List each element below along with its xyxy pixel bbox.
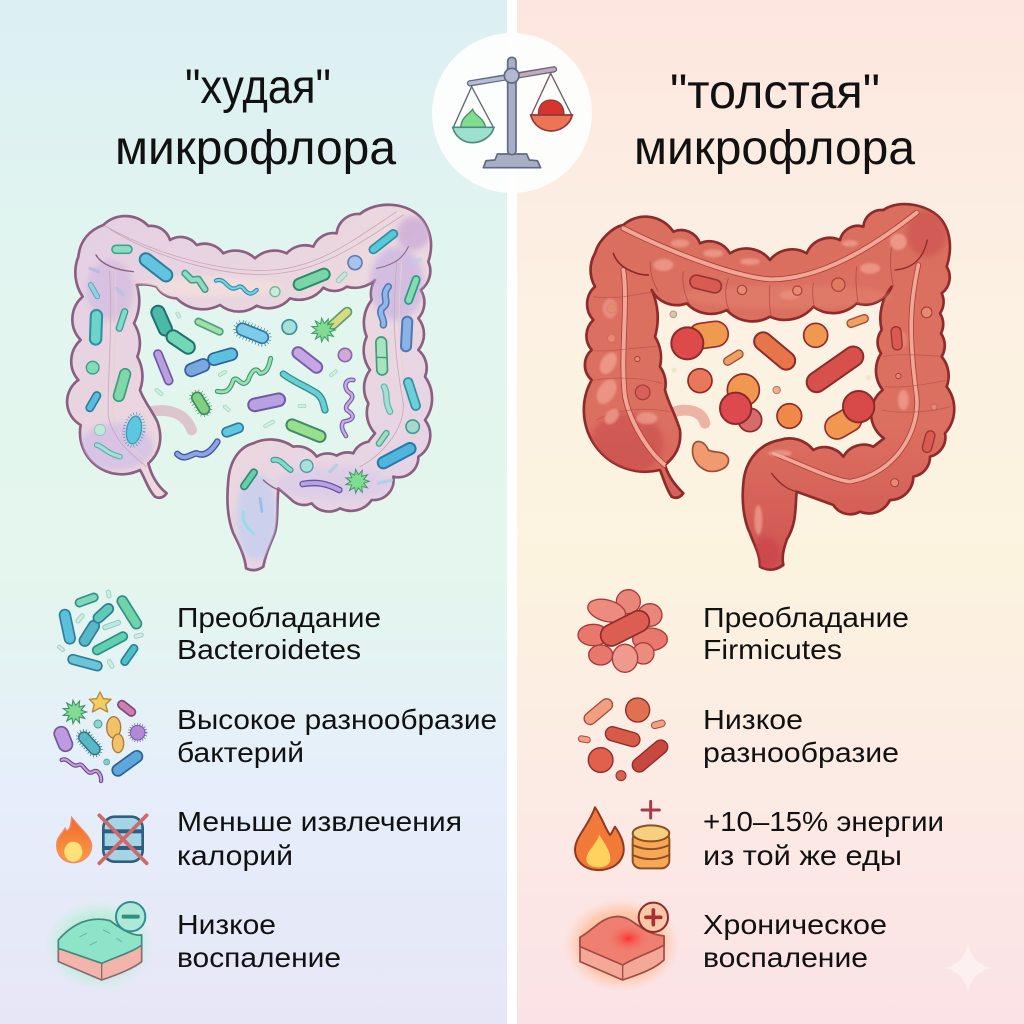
text: fewer calories: Меньше извлечения xyxy=(177,806,462,837)
colon shading and band xyxy=(588,210,950,570)
bacteria inside colon xyxy=(85,228,423,533)
text: low diversity: разнообразие xyxy=(703,737,899,768)
text: low inflammation xyxy=(177,909,341,973)
fold lines xyxy=(613,253,648,275)
icon: Firmicutes cluster xyxy=(578,590,667,672)
text: Bacteroidetes: Преобладание xyxy=(177,602,381,633)
text: low inflammation: воспаление xyxy=(177,942,341,973)
text: Bacteroidetes xyxy=(177,602,381,665)
text: high diversity: бактерий xyxy=(177,737,304,768)
free bacteria xyxy=(670,311,874,471)
appendix xyxy=(675,410,705,423)
panel: thin microflora xyxy=(44,61,497,990)
text: fewer calories: калорий xyxy=(177,840,293,871)
title: thin microflora: микрофлора xyxy=(115,122,396,175)
icon: Bacteroidetes rods xyxy=(57,590,144,672)
icon: low diversity xyxy=(578,696,671,781)
free bacteria between colon loops xyxy=(149,304,353,457)
text: chronic inflammation xyxy=(703,909,887,973)
fold line right xyxy=(895,240,927,270)
title: fat microflora xyxy=(634,66,915,175)
text: chronic inflammation: Хроническое xyxy=(703,909,887,940)
icon: chronic inflammation tissue xyxy=(563,898,680,992)
text: low diversity: Низкое xyxy=(703,704,803,735)
text: chronic inflammation: воспаление xyxy=(703,942,868,973)
panel: fat microflora xyxy=(563,66,954,992)
text: fewer calories xyxy=(177,806,462,871)
text: extra energy: из той же еды xyxy=(703,840,902,871)
icon: diverse bacteria xyxy=(52,692,146,781)
appendix xyxy=(150,411,192,430)
fold lines xyxy=(96,255,133,272)
title: fat microflora: "толстая" xyxy=(670,66,880,119)
icon: low inflammation tissue xyxy=(44,900,154,990)
fold line rectum xyxy=(772,473,797,492)
title: thin microflora: "худая" xyxy=(185,61,331,114)
colon outline xyxy=(584,204,954,570)
icon: flame with crossed-out coins xyxy=(57,815,147,863)
list: thin microflora traits xyxy=(177,602,497,973)
icon: scale xyxy=(453,57,572,168)
icons: left column xyxy=(44,590,154,990)
badge circle xyxy=(432,33,592,193)
badge: balance scale xyxy=(432,33,592,193)
text: extra energy xyxy=(703,806,944,871)
title: thin microflora xyxy=(115,61,396,175)
text: Firmicutes: Преобладание xyxy=(703,602,909,633)
background: left panel xyxy=(0,0,507,1024)
fold line right xyxy=(377,247,408,268)
bacteria inside colon xyxy=(607,274,937,487)
watermark: sparkle xyxy=(944,944,992,992)
text: Bacteroidetes: Bacteroidetes xyxy=(177,634,361,665)
illustration: pale colon with diverse bacteria xyxy=(67,205,432,570)
illustration: red colon with few bacteria xyxy=(584,204,954,570)
text: Firmicutes: Firmicutes xyxy=(703,634,842,665)
text: high diversity xyxy=(177,704,497,768)
title: fat microflora: микрофлора xyxy=(634,122,915,175)
text: extra energy: +10–15% энергии xyxy=(703,806,944,837)
background: right panel xyxy=(517,0,1024,1024)
list: fat microflora traits xyxy=(703,602,944,973)
text: Firmicutes xyxy=(703,602,909,665)
icon: flame with coin stack xyxy=(575,801,669,870)
text: low inflammation: Низкое xyxy=(177,909,276,940)
icons: right column xyxy=(563,590,680,992)
text: high diversity: Высокое разнообразие xyxy=(177,704,497,735)
colon shading xyxy=(80,212,430,560)
text: low diversity xyxy=(703,704,899,768)
colon outline xyxy=(67,205,432,570)
